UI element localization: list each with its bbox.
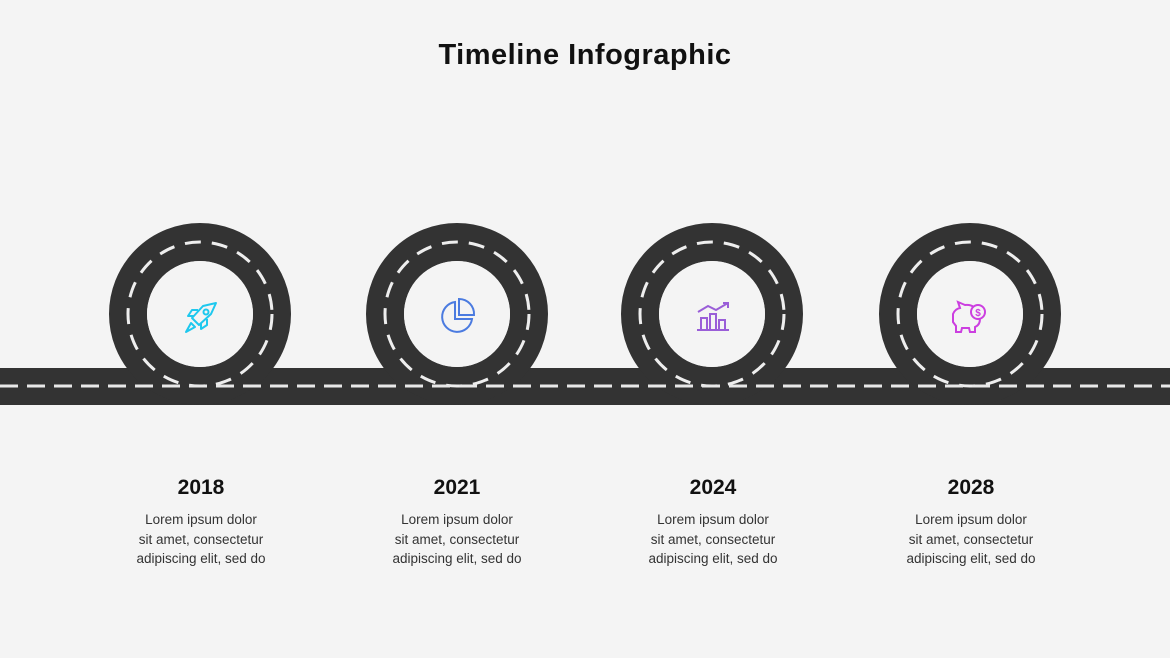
text block 2021: 2021: [434, 476, 480, 499]
loop 1: [128, 242, 272, 386]
text block 2021: Lorem ipsum dolor: [401, 512, 513, 527]
text block 2021: adipiscing elit, sed do: [392, 551, 522, 566]
loop 2: [385, 242, 529, 386]
road center dashes: [0, 384, 1170, 388]
text block 2018: sit amet, consectetur: [139, 532, 263, 546]
loop 3: [640, 242, 784, 386]
text block 2028: Lorem ipsum dolor: [915, 512, 1027, 527]
text block 2018: Lorem ipsum dolor: [145, 512, 257, 527]
text block 2028: [906, 476, 1036, 566]
text block 2028: 2028: [948, 476, 994, 499]
text block 2021: [392, 476, 522, 566]
text block 2024: sit amet, consectetur: [651, 532, 775, 546]
title: Timeline Infographic: [438, 39, 732, 71]
icon: rocket: [186, 303, 216, 332]
text block 2028: sit amet, consectetur: [909, 532, 1033, 546]
icon: piggy bank: [953, 302, 985, 332]
text block 2021: sit amet, consectetur: [395, 532, 519, 546]
icon: pie chart: [442, 299, 474, 332]
text block 2024: adipiscing elit, sed do: [648, 551, 778, 566]
loop 4: [898, 242, 1042, 386]
text block 2024: Lorem ipsum dolor: [657, 512, 769, 527]
text block 2018: [136, 476, 266, 566]
text block 2018: adipiscing elit, sed do: [136, 551, 266, 566]
icon: bar chart: [697, 303, 729, 330]
text block 2024: 2024: [690, 476, 736, 499]
road straight: [0, 368, 1170, 405]
text block 2024: [648, 476, 778, 566]
text block 2028: adipiscing elit, sed do: [906, 551, 1036, 566]
icon: piggy bank: $: [975, 308, 981, 319]
text block 2018: 2018: [178, 476, 224, 499]
